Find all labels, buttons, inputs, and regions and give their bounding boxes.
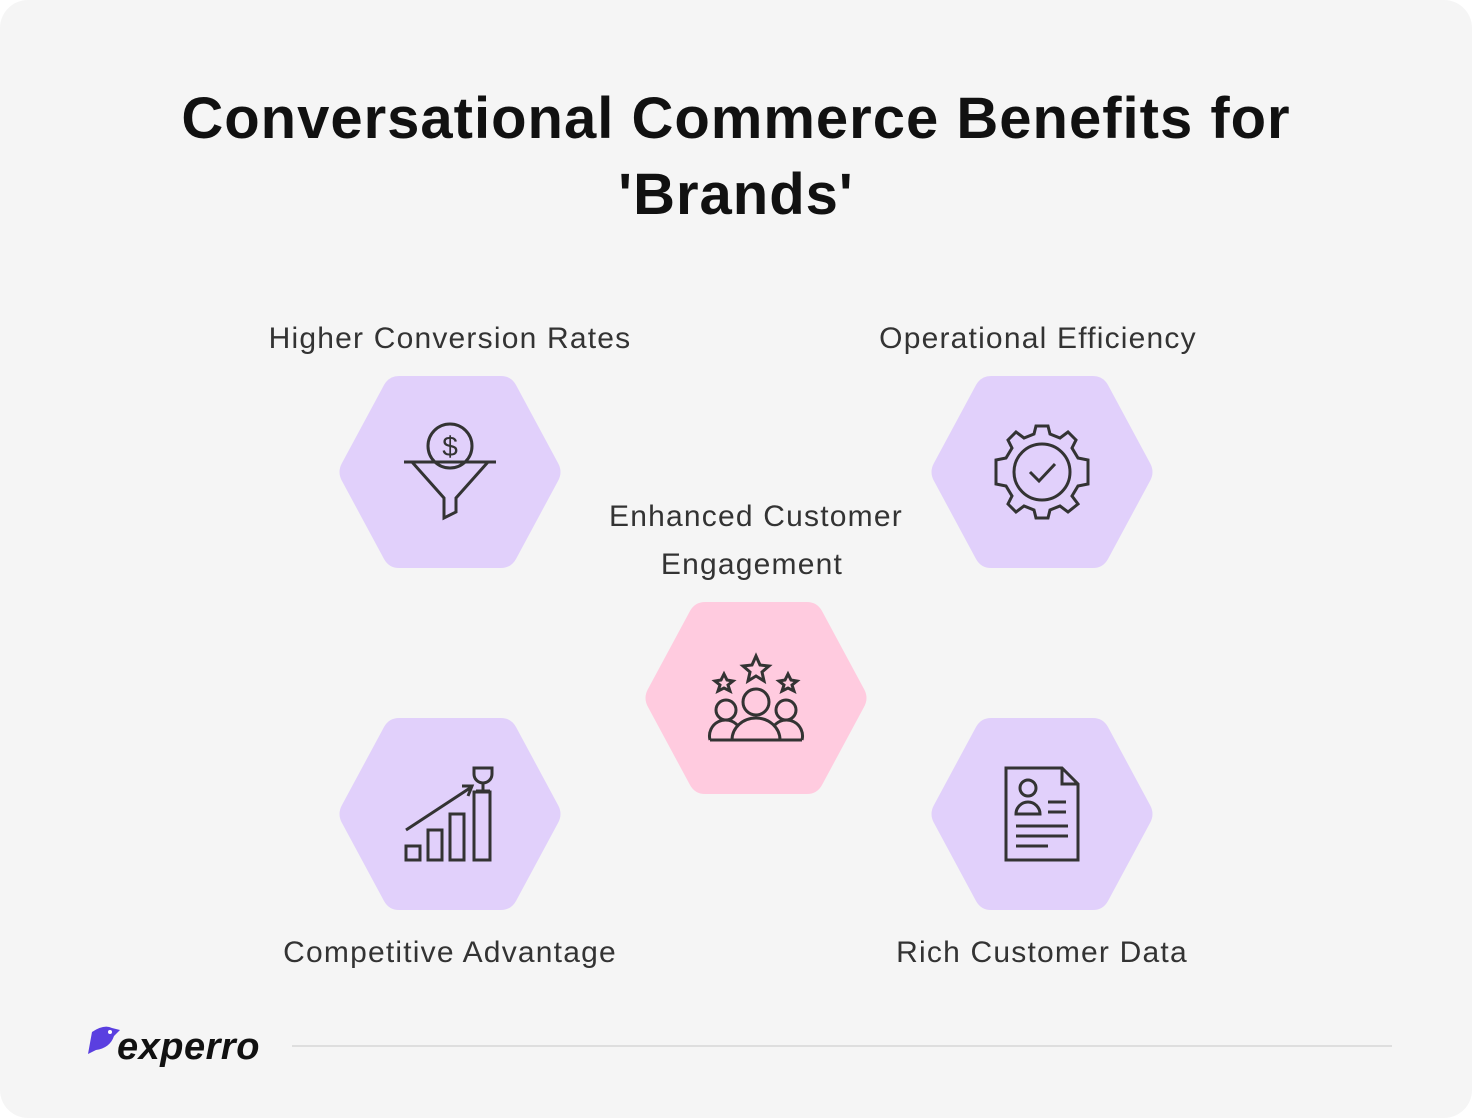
label: higher conversion rates: Higher Conversion Rates bbox=[269, 322, 631, 355]
icon: funnel with dollar: $ bbox=[442, 431, 458, 462]
hexagon: competitive advantage bbox=[340, 718, 560, 910]
hexagon: higher conversion rates bbox=[340, 376, 560, 568]
icon: bar chart with trophy bbox=[406, 768, 492, 860]
icon: gear with check bbox=[996, 426, 1088, 518]
hexagon: enhanced customer engagement bbox=[646, 602, 866, 794]
label: rich customer data: Rich Customer Data bbox=[896, 936, 1188, 969]
logo: experro: experro bbox=[117, 1026, 260, 1068]
icon: funnel with dollar bbox=[404, 424, 496, 518]
hexagon: operational efficiency bbox=[932, 376, 1152, 568]
label: operational efficiency: Operational Efficiency bbox=[879, 322, 1197, 355]
icon: document with profile bbox=[1006, 768, 1078, 860]
icon: people with stars bbox=[709, 656, 803, 740]
title: Conversational Commerce Benefits for bbox=[181, 86, 1291, 151]
title bbox=[181, 86, 1291, 227]
hexagon: rich customer data bbox=[932, 718, 1152, 910]
label: enhanced customer engagement: Enhanced Customer bbox=[609, 500, 903, 533]
label: competitive advantage: Competitive Advantage bbox=[283, 936, 617, 969]
label: enhanced customer engagement: Engagement bbox=[661, 548, 843, 581]
title: 'Brands' bbox=[618, 162, 854, 227]
label: enhanced customer engagement bbox=[609, 500, 903, 581]
